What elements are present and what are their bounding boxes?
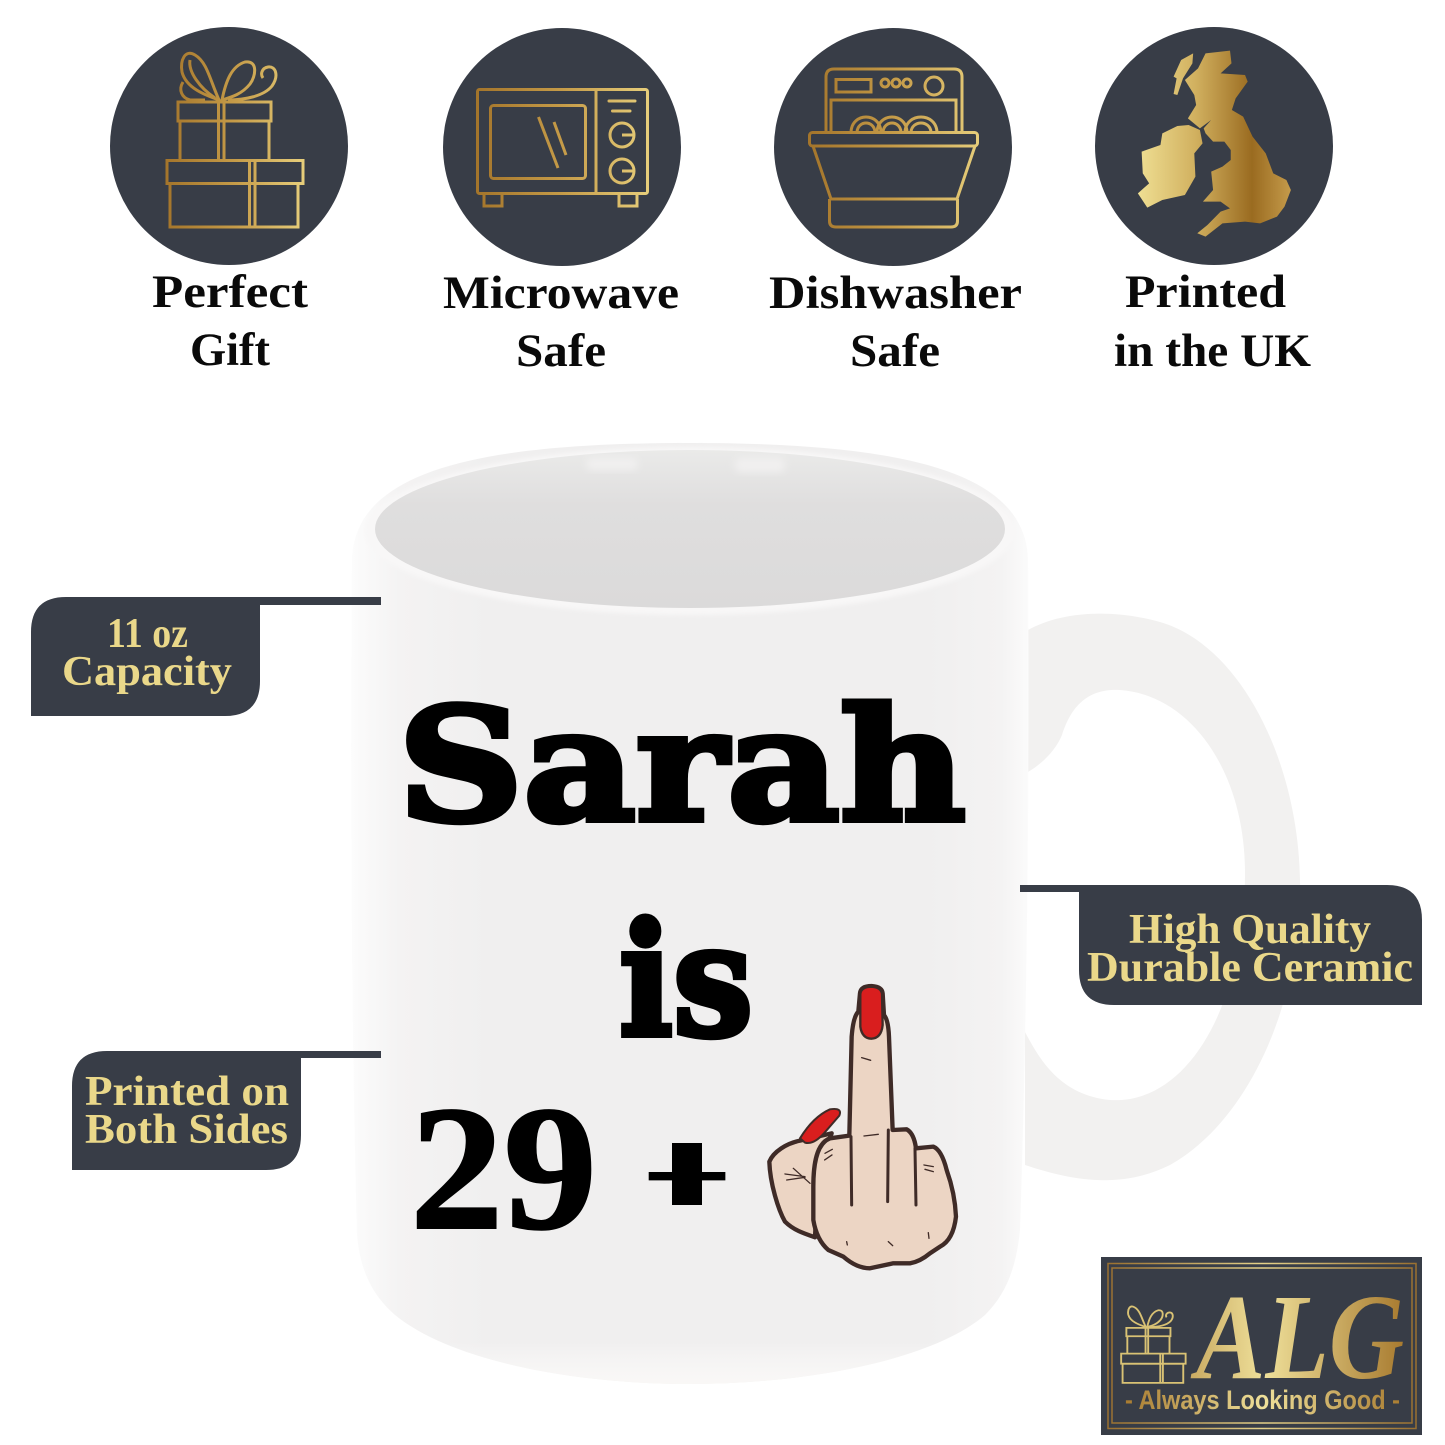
mug interior	[375, 450, 1005, 608]
label: perfect gift: Perfect	[152, 266, 308, 318]
label: microwave safe: Microwave	[443, 267, 679, 319]
thumb nail	[800, 1109, 840, 1143]
logo gift icon	[1121, 1306, 1186, 1383]
callout text: Printed on	[85, 1069, 289, 1115]
logo double frame	[1108, 1264, 1416, 1428]
finger creases	[785, 1058, 933, 1246]
mug print: 29: 29	[410, 1069, 597, 1267]
callout box and leader line	[1020, 885, 1422, 1005]
middle finger nail	[860, 987, 883, 1039]
label: perfect gift	[152, 266, 308, 376]
callout text: 11 oz	[107, 611, 188, 657]
badge: microwave safe	[443, 28, 681, 266]
callout: printed on both sides	[72, 1051, 381, 1170]
icon: dishwasher	[810, 69, 978, 227]
badge: printed in the UK	[1095, 27, 1333, 265]
interior highlight left	[586, 458, 638, 470]
label: printed in the UK: in the UK	[1114, 325, 1311, 377]
callout text: High Quality	[1129, 907, 1371, 953]
mug print: plus sign: +	[640, 1109, 734, 1242]
icon: raised middle finger hand	[769, 986, 956, 1268]
label: perfect gift: Gift	[190, 324, 270, 376]
badge circle	[443, 28, 681, 266]
mug body	[351, 443, 1029, 1384]
callout text	[1087, 907, 1413, 991]
badge circle	[110, 27, 348, 265]
label: dishwasher safe: Dishwasher	[769, 267, 1022, 319]
callout box and leader line	[31, 597, 381, 716]
label: printed in the UK	[1114, 266, 1311, 377]
badge circle	[774, 28, 1012, 266]
badge: dishwasher safe	[774, 28, 1012, 266]
logo background	[1101, 1257, 1422, 1435]
callout text: Capacity	[62, 649, 232, 695]
mug photo	[351, 443, 1300, 1384]
callout text	[85, 1069, 289, 1153]
icon: microwave	[478, 90, 648, 206]
brand logo	[1101, 1257, 1422, 1435]
icon: stacked gift boxes	[167, 53, 303, 227]
badge: perfect gift	[110, 27, 348, 265]
callout text: Durable Ceramic	[1087, 945, 1413, 991]
badge circle	[1095, 27, 1333, 265]
callout: 11 oz capacity	[31, 597, 381, 716]
mug print: Sarah: Sarah	[398, 674, 966, 857]
label: printed in the UK: Printed	[1125, 266, 1286, 318]
label: dishwasher safe	[769, 267, 1022, 377]
mug handle	[1025, 614, 1300, 1180]
mug print: is: is	[619, 889, 753, 1072]
label: microwave safe: Safe	[516, 325, 606, 377]
rim shine	[365, 447, 1015, 615]
label: microwave safe	[443, 267, 679, 377]
label: dishwasher safe: Safe	[850, 325, 940, 377]
callout box and leader line	[72, 1051, 381, 1170]
mug lower highlight	[357, 1150, 1022, 1384]
callout: high quality durable ceramic	[1020, 885, 1422, 1005]
logo monogram ALG: ALG	[1190, 1270, 1404, 1405]
interior highlight right	[735, 458, 785, 472]
fist and middle finger	[813, 986, 956, 1268]
callout text: Both Sides	[85, 1107, 288, 1153]
thumb and back of hand	[769, 1133, 832, 1237]
callout text	[62, 611, 232, 695]
icon: map of UK and Ireland	[1138, 51, 1291, 237]
logo tagline: - Always Looking Good -	[1125, 1385, 1400, 1415]
